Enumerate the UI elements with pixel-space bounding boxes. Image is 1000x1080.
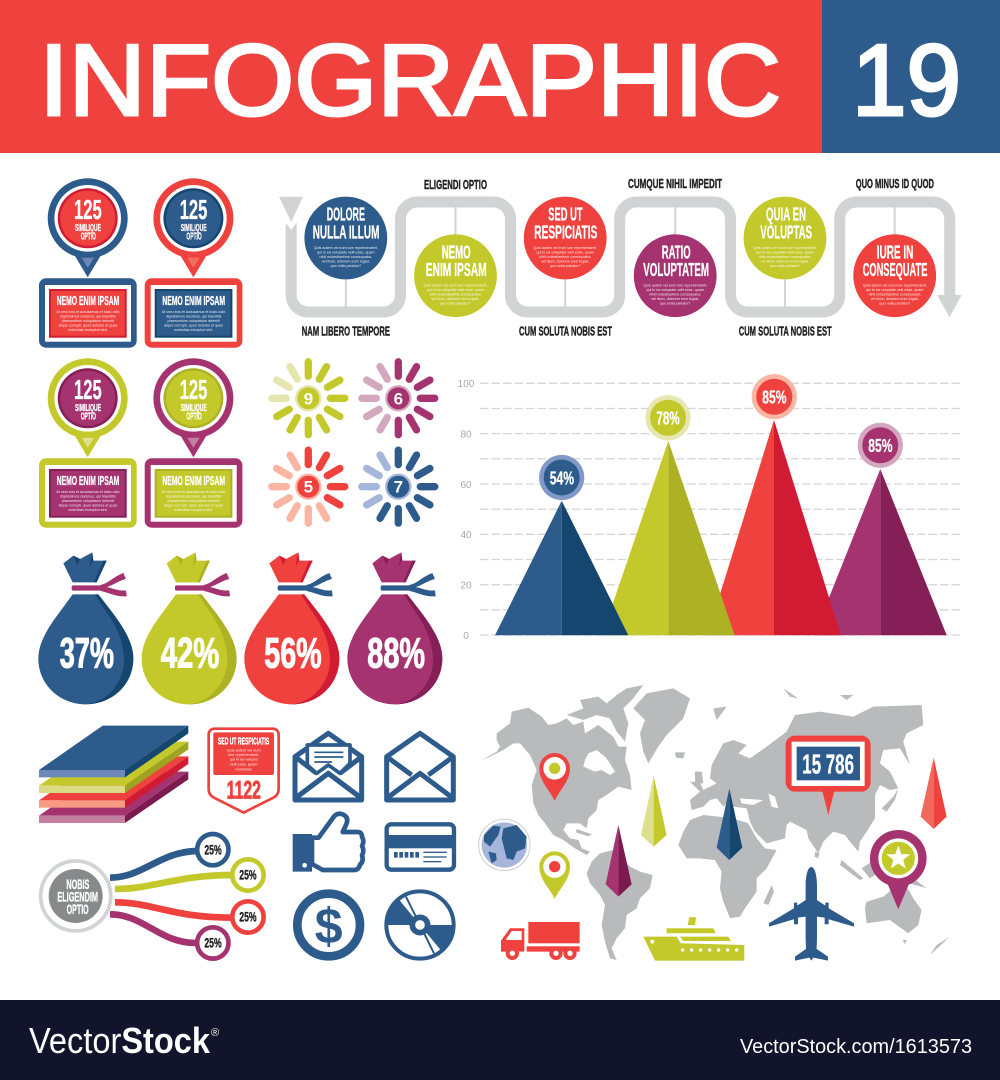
bar: purple 85% (814, 423, 947, 635)
marker: lime kite (641, 776, 667, 847)
shield badge: Quis autem vel eum (227, 748, 261, 752)
step: nemo enim ipsam: qui in ea voluptate velit esse, quam (427, 288, 484, 292)
chart grid and axis: 20 (460, 580, 472, 592)
pin card: blue and red (39, 178, 137, 348)
bag: 42% (142, 552, 237, 704)
pin card: purple and lime: molestias excepturi sint. (174, 508, 213, 512)
step: iure in consequate: IURE IN (877, 242, 913, 262)
pin card: blue and red: molestias excepturi sint. (68, 328, 108, 332)
step: ratio voluptatem: quo nulla pariatur? (660, 302, 690, 306)
bar: blue 54% (495, 455, 628, 635)
header banner (0, 0, 1000, 153)
step: dolore nulla illum: vel illum, dolorem eum fugiat, (322, 260, 370, 264)
marker: purple kite (606, 825, 632, 897)
bar: lime 78%: 78% (656, 408, 680, 428)
registered mark: ® (211, 1027, 219, 1039)
icon: dollar coin: $ (315, 898, 343, 954)
pin card: purple and lime: atque corrupti, quos dolores et quas (164, 503, 223, 507)
step: sed ut respiciatis: RESPICIATIS (534, 222, 597, 242)
step: iure in consequate: CONSEQUATE (863, 260, 927, 280)
pin card: lime and purple: praesentium voluptatum deleniti (62, 499, 114, 503)
step: quia en voluptas: nihil molestiaetime consequatur, (759, 255, 811, 259)
step: iure in consequate: quo nulla pariatur? (879, 302, 910, 306)
pin: purple with star (870, 830, 927, 909)
step: ratio voluptatem: Quis autem vel eum iure reprehenderit, (643, 284, 707, 288)
arrow path (279, 197, 962, 317)
node: red 25% (232, 901, 264, 933)
step: ratio voluptatem: nihil molestiaetime consequatur, (649, 293, 701, 297)
hub: nobis eligendim optio: ELIGENDIM (57, 889, 98, 905)
pin card: blue and red: atque corrupti, quos dolores et quas (58, 323, 117, 327)
step: nemo enim ipsam: NEMO (442, 242, 471, 262)
dial: 5 (272, 450, 345, 523)
chart grid and axis (458, 379, 962, 642)
bag: 56%: 56% (264, 630, 322, 678)
panel: triangle bar chart (458, 374, 962, 642)
stacked layers (39, 726, 188, 823)
step: dolore nulla illum: qui in ea voluptate velit esse, quam (317, 250, 375, 254)
bar: red 85% (707, 374, 841, 635)
step: iure in consequate: qui in ea voluptate velit esse, quam (866, 288, 924, 292)
pin card: red and blue: praesentium voluptatum deleniti (168, 319, 220, 323)
bag: 37% (38, 552, 133, 704)
panel: money bags (38, 552, 442, 704)
world map (482, 685, 950, 960)
step: quia en voluptas: quo nulla pariatur? (770, 264, 800, 268)
icon: compact disc (386, 891, 454, 959)
step: sed ut respiciatis: SED UT (548, 205, 583, 225)
hub: nobis eligendim optio (41, 861, 111, 931)
pin card: red and blue: At vero eos et accusamus et iusto odio (162, 310, 225, 314)
step: nemo enim ipsam: vel illum, dolorem eum fugiat, (432, 297, 479, 301)
dial: 5: 5 (304, 478, 313, 497)
image id: VectorStock.com/1613573 (740, 1036, 972, 1058)
title: INFOGRAPHIC (39, 25, 781, 137)
chart grid and axis: 80 (460, 430, 472, 440)
callout: 15 786 (786, 736, 871, 815)
node: lime 25% (232, 859, 264, 891)
step: quia en voluptas: VOLUPTAS (760, 222, 812, 242)
pin card: purple and lime: At vero eos et accusamus et iusto odio (162, 490, 225, 494)
pin card: lime and purple: SIMILIQUE (75, 403, 101, 414)
step: sed ut respiciatis: vel illum, dolorem eum fugiat, (541, 260, 589, 264)
shield badge: qui in ea volupta (230, 758, 258, 762)
hub: nobis eligendim optio: OPTIO (67, 901, 89, 917)
bar: purple 85%: 85% (868, 436, 892, 456)
step: dolore nulla illum: NULLA ILLUM (313, 222, 379, 242)
shield badge (209, 729, 279, 813)
step: sed ut respiciatis: nihil molestiaetime consequatur, (539, 255, 591, 259)
pin card: purple and lime (145, 358, 242, 528)
step: sed ut respiciatis: qui in ea voluptate velit esse, quam (536, 250, 594, 254)
pin card: purple and lime: 125 (180, 374, 207, 405)
step: ratio voluptatem (634, 234, 717, 317)
pin card: red and blue: NEMO ENIM IPSAM (162, 294, 225, 308)
pin card: purple and lime: NEMO ENIM IPSAM (162, 474, 225, 488)
flow diagram (41, 834, 264, 959)
step: ratio voluptatem: RATIO (662, 242, 691, 262)
node: red 25%: 25% (239, 909, 257, 925)
hub: nobis eligendim optio: NOBIS (66, 876, 89, 892)
panel: world map with pins and transport (479, 685, 950, 961)
chart grid and axis: 40 (460, 530, 472, 541)
pin card: blue and red: OPTIO (81, 232, 96, 242)
step: iure in consequate (853, 234, 936, 317)
node: purple 25% (197, 927, 228, 959)
icon: credit card (387, 824, 454, 870)
pin card: red and blue: molestias excepturi sint. (174, 328, 213, 332)
bag: 37%: 37% (60, 630, 114, 678)
icon: envelope with letter (295, 733, 362, 800)
timeline labels: QUO MINUS ID QUOD (856, 176, 934, 191)
node: blue 25%: 25% (204, 841, 222, 857)
step: ratio voluptatem: VOLUPTATEM (643, 260, 709, 280)
step: nemo enim ipsam: ENIM IPSAM (426, 260, 487, 280)
callout: 15 786: 15 786 (802, 748, 854, 779)
chart grid and axis: 60 (460, 480, 472, 491)
pin card: red and blue: dignissimos ducimus, qui blanditis (166, 314, 222, 318)
step: dolore nulla illum: nihil molestiaetime consequatur, (320, 255, 372, 259)
pin card: blue and red: At vero eos et accusamus et iusto odio (56, 310, 120, 314)
timeline labels: CUM SOLUTA NOBIS EST (519, 324, 612, 339)
pin card: red and blue: atque corrupti, quos dolores et quas (164, 323, 223, 327)
bar: blue 54%: 54% (550, 468, 574, 488)
chart grid and axis: 0 (463, 631, 469, 642)
panel: location pins with text boxes (39, 178, 242, 528)
timeline labels: NAM LIBERO TEMPORE (302, 324, 390, 339)
brand logo text: VectorStock (29, 1020, 211, 1061)
pin card: blue and red: SIMILIQUE (75, 223, 101, 234)
pin card: lime and purple (39, 358, 137, 528)
bag: 88% (347, 552, 442, 704)
pin card: red and blue: SIMILIQUE (181, 223, 207, 234)
icon: airplane (769, 867, 854, 961)
shield badge: 1122 (227, 776, 261, 804)
shield badge: SED UT RESPICIATIS (218, 736, 269, 747)
step: iure in consequate: nihil molestiaetime consequatur, (868, 293, 921, 297)
node: purple 25%: 25% (204, 935, 222, 951)
node: lime 25%: 25% (239, 867, 257, 883)
timeline labels: ELIGENDI OPTIO (424, 177, 487, 192)
pin card: purple and lime: praesentium voluptatum deleniti (168, 499, 220, 503)
dial: 6: 6 (394, 389, 403, 408)
pin card: lime and purple: 125 (74, 374, 102, 405)
step: dolore nulla illum (304, 197, 387, 279)
timeline labels: CUMQUE NIHIL IMPEDIT (628, 176, 722, 191)
step: iure in consequate: vel illum, dolorem eum fugiat, (871, 297, 919, 301)
pin card: purple and lime: OPTIO (186, 412, 202, 422)
pin card: lime and purple: atque corrupti, quos dolores et quas (58, 503, 117, 507)
marker: red kite (921, 758, 947, 829)
icon: ship (643, 917, 744, 961)
shield badge: molestiae (235, 768, 252, 772)
pin card: red and blue: OPTIO (186, 232, 202, 242)
pin card: blue and red: praesentium voluptatum deleniti (62, 319, 114, 323)
step: sed ut respiciatis: Quis autem vel eum iure reprehenderit, (533, 246, 597, 250)
bar: lime 78% (602, 395, 735, 635)
step: dolore nulla illum: quo nulla pariatur? (331, 264, 361, 268)
pin card: lime and purple: molestias excepturi sint. (68, 508, 108, 512)
step: iure in consequate: Quis autem vel eum iure reprehenderit, (863, 284, 927, 288)
dial: 7 (362, 450, 435, 523)
pin: lime with red dot (539, 851, 570, 899)
step: nemo enim ipsam: quo nulla pariatur? (440, 302, 471, 306)
step: dolore nulla illum: DOLORE (327, 205, 365, 225)
pin card: purple and lime: SIMILIQUE (181, 403, 207, 414)
bar: red 85%: 85% (762, 388, 786, 408)
step: quia en voluptas: vel illum, dolorem eum fugiat, (761, 260, 809, 264)
dial: 9 (272, 362, 345, 435)
pin card: purple and lime: dignissimos ducimus, qui blanditis (166, 494, 222, 498)
step: quia en voluptas: Quis autem vel eum iure reprehenderit, (753, 246, 817, 250)
bag: 88%: 88% (367, 630, 425, 678)
icon: truck (501, 922, 580, 960)
step: ratio voluptatem: qui in ea voluptate velit esse, quam (646, 288, 704, 292)
panel: layers, shield and flow diagram (39, 726, 279, 959)
node: blue 25% (197, 834, 228, 865)
dial: 7: 7 (394, 478, 403, 497)
pin card: blue and red: dignissimos ducimus, qui blanditis (60, 314, 116, 318)
pin card: lime and purple: At vero eos et accusamus et iusto odio (56, 490, 120, 494)
pin: red with lime dot (539, 753, 570, 801)
icon: dollar coin (297, 894, 360, 956)
step: sed ut respiciatis (524, 197, 607, 279)
step: quia en voluptas (744, 197, 826, 279)
footer bar (0, 1000, 1000, 1080)
panel: serpentine process timeline (279, 176, 962, 339)
pin card: lime and purple: OPTIO (81, 412, 96, 422)
chart grid and axis: 100 (458, 379, 475, 390)
timeline labels (302, 176, 934, 339)
pin card: lime and purple: dignissimos ducimus, qui blanditis (60, 494, 116, 498)
step: ratio voluptatem: vel illum, dolorem eum fugiat, (651, 297, 699, 301)
panel: icons (293, 733, 454, 959)
icon: thumbs up (293, 814, 363, 872)
icon: open envelope (387, 733, 453, 800)
shield badge: iure reprehenderit, (228, 753, 259, 757)
step: nemo enim ipsam (414, 234, 497, 317)
step: quia en voluptas: qui in ea voluptate velit esse, quam (756, 250, 814, 254)
dial: 9: 9 (304, 389, 313, 408)
pin card: lime and purple: NEMO ENIM IPSAM (57, 474, 119, 488)
timeline labels: CUM SOLUTA NOBIS EST (739, 324, 832, 339)
step: nemo enim ipsam: Quis autem vel eum iure reprehenderit, (424, 284, 487, 288)
step: dolore nulla illum: Quis autem vel eum iure reprehenderit, (314, 246, 378, 250)
pin card: red and blue (145, 178, 242, 348)
issue number: 19 (852, 25, 961, 137)
panel: radial progress dials (272, 362, 435, 523)
step: nemo enim ipsam: nihil molestiaetime consequatur, (429, 293, 482, 297)
pin card: blue and red: NEMO ENIM IPSAM (57, 294, 119, 308)
dial: 6 (362, 362, 435, 435)
marker: blue kite (717, 788, 742, 860)
shield badge: velit esse, quam (230, 763, 257, 767)
bag: 42%: 42% (161, 630, 219, 678)
bag: 56% (244, 552, 339, 704)
globe (479, 819, 530, 871)
pin card: blue and red: 125 (74, 194, 102, 225)
pin card: red and blue: 125 (180, 194, 207, 225)
step: sed ut respiciatis: quo nulla pariatur? (550, 264, 580, 268)
step: quia en voluptas: QUIA EN (766, 205, 806, 225)
